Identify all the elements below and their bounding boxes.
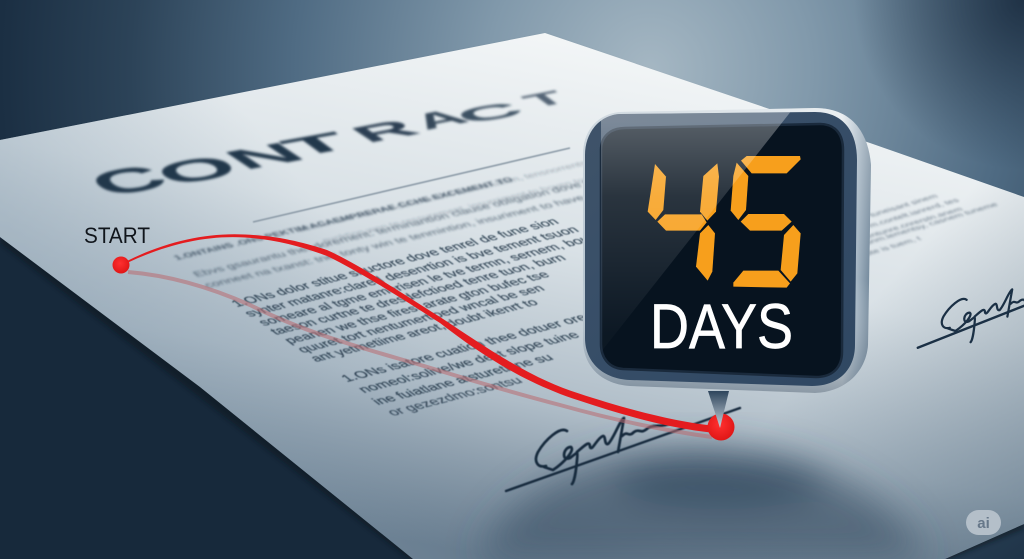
- timeline curve: [127, 234, 715, 433]
- heading: CONTRACT: C: [446, 98, 533, 128]
- label: START: START: [84, 223, 150, 248]
- badge frame: [585, 112, 857, 386]
- badge screen: [601, 124, 843, 377]
- text block: clause one: [227, 215, 594, 364]
- heading: CONTRACT: T: [515, 87, 575, 111]
- number: 45: [648, 156, 801, 288]
- text block: clause one: 1.ONs dolor stitue shuctore dove tenrel de fune sion: [227, 215, 562, 309]
- text block: clause one: quuret tort nentumertioed wncal be sen: [293, 282, 548, 355]
- text block: upper clauses: 1.ONTAINS .ONS PEKTIM ACAEMPRERAE CCHE EXCEMENT TO: [172, 176, 516, 262]
- title rule: [253, 148, 570, 222]
- text block: upper clauses: evoktion wen te ressurement, insurniment to hoven tomertion: [320, 169, 624, 245]
- watermark: ai: [966, 510, 1001, 535]
- text block: upper clauses: conneet na txanst: tnet tonty win te tenmintion, insuriment to have: [201, 193, 588, 290]
- shadow under badge: [480, 446, 925, 559]
- text block: clause one: someare al tgme emerisen le tve termn, sernem, bou: [254, 233, 594, 328]
- text block: upper clauses: [172, 147, 647, 290]
- text block: clause one: taeson curtne te dresdefctioed tenre tuon, burn: [266, 252, 569, 337]
- faint path shadow: [128, 272, 712, 437]
- signature: lower: [506, 408, 740, 491]
- end marker: [708, 414, 734, 440]
- text block: clause two: 1.ONs isatore cuation thee dotuer ore: [338, 312, 592, 384]
- signature: right: [918, 289, 1024, 348]
- text block: clause two: ine fuiatlane atsturetitine su: [369, 352, 557, 407]
- text block: clause two: nomeol:solive/we dest slope tuine: [355, 330, 584, 395]
- text block: upper clauses: adsuemant wen the dorarement tearnsination, tensnorrents inte comen: [295, 147, 647, 234]
- badge rim: [583, 108, 871, 393]
- text block: clause two: [338, 312, 592, 418]
- heading: CONTRACT: O: [143, 149, 251, 192]
- heading: CONTRACT: A: [403, 104, 476, 134]
- watermark: ai: ai: [977, 515, 990, 532]
- text block: clause one: ant yetmetiime areot, doubt ikenrt to: [306, 296, 542, 364]
- text block: right clauses: mentunre.cnrerstn.anem: [855, 206, 965, 242]
- start marker: [112, 256, 130, 274]
- heading: CONTRACT: N: [212, 137, 316, 175]
- heading: CONTRACT: C: [77, 158, 181, 204]
- text block: clause two: or gezezdmo:sontsu: [384, 375, 526, 418]
- heading: CONTRACT: R: [341, 115, 429, 147]
- text block: right clauses: ctute is tuem, t: [855, 235, 924, 259]
- text block: clause one: peanen we thse firest arate gton bufec tse: [280, 269, 553, 346]
- text block: clause one: synter matanre:clared desenrtion is bve tement tsuon: [240, 224, 582, 319]
- text block: right clauses: tuneisant sinem: [867, 193, 940, 218]
- heading: CONTRACT: [77, 87, 575, 204]
- text block: upper clauses: Ebvs gsaurantu thet dorernent: terminantion clause obligation dove te: [190, 177, 600, 279]
- text block: right clauses: turm.contelt.ianrerd, tes: [855, 197, 962, 232]
- label: DAYS: DAYS: [650, 292, 793, 362]
- panel: 45 days badge: [583, 108, 871, 393]
- heading: CONTRACT: T: [271, 127, 363, 162]
- badge pointer: [708, 391, 729, 428]
- text block: right clauses: ctunm.lementsy, casnem tuneme: [855, 201, 1000, 248]
- glass glare: [601, 112, 790, 318]
